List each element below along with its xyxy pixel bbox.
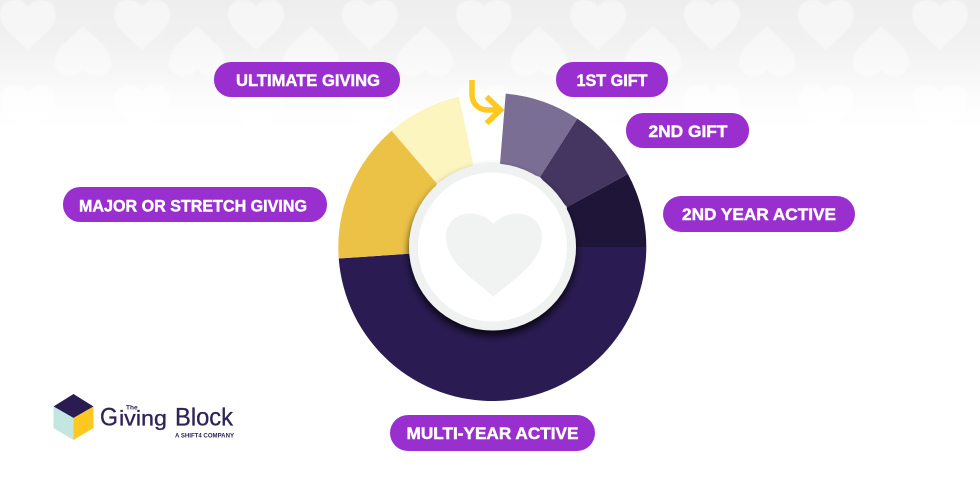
icon: centre heart — [446, 214, 542, 297]
label: 2nd year active — [663, 196, 855, 232]
label: ultimate giving: ULTIMATE GIVING — [236, 71, 380, 90]
centre disc — [409, 164, 576, 330]
wordmark: A SHIFT4 COMPANY — [175, 432, 235, 440]
arrow: start marker — [472, 80, 500, 123]
label: 2nd gift: 2ND GIFT — [648, 122, 728, 141]
segment: ultimate giving — [392, 97, 473, 183]
donut chart — [338, 94, 646, 401]
label: 2nd year active: 2ND YEAR ACTIVE — [682, 205, 836, 224]
wordmark — [100, 404, 235, 440]
logo: The Giving Block — [54, 394, 235, 440]
segment: multi-year active — [339, 247, 646, 401]
wordmark: iving — [119, 408, 167, 430]
wordmark: Block — [175, 404, 233, 432]
label: 1st gift — [556, 62, 668, 97]
label: multi-year active: MULTI-YEAR ACTIVE — [406, 424, 578, 443]
label: major or stretch giving — [63, 187, 327, 222]
label: major or stretch giving: MAJOR OR STRETCH GIVING — [79, 196, 307, 216]
background gradient band — [0, 0, 980, 130]
label: ultimate giving — [214, 62, 400, 97]
label: 2nd gift — [626, 113, 749, 148]
icon: cube — [54, 394, 94, 440]
wordmark: G — [100, 404, 118, 432]
heart pattern — [0, 0, 968, 135]
label: 1st gift: 1ST GIFT — [576, 71, 648, 90]
segment: 1st gift — [500, 94, 577, 177]
segment: 2nd year active — [560, 174, 646, 247]
wordmark: The — [126, 404, 138, 412]
white gap behind donut start — [459, 93, 506, 165]
segment: major or stretch giving — [338, 131, 437, 258]
label: multi-year active — [390, 415, 595, 451]
segment: 2nd gift — [540, 119, 628, 207]
